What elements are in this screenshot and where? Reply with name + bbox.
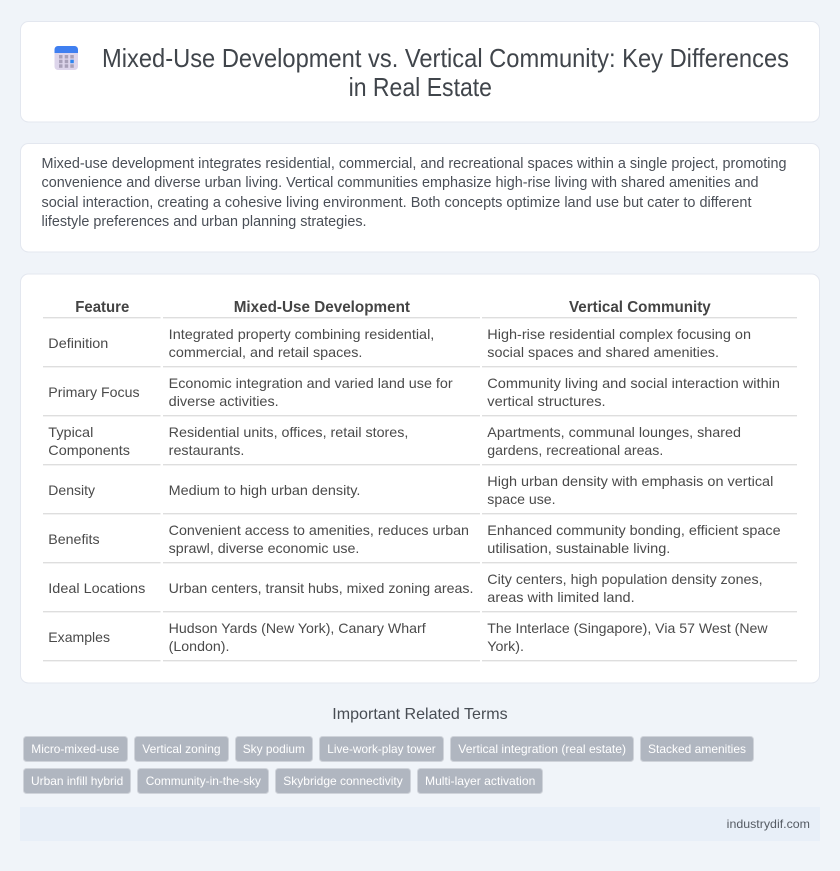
- tag: [640, 736, 754, 762]
- row: definition: commercial, and retail spaces.: [169, 344, 362, 360]
- row: examples: Examples: [48, 629, 110, 645]
- tag: Vertical integration (real estate): [458, 742, 626, 756]
- title: in Real Estate: [349, 74, 492, 102]
- table header: Mixed-Use Development: [234, 299, 411, 316]
- row: examples: York).: [487, 638, 524, 654]
- row: definition: Integrated property combining residential,: [169, 326, 434, 342]
- intro text: convenience and diverse urban living. Vertical communities emphasize high-rise living with shared amenities and: [42, 175, 758, 191]
- row: definition: Definition: [48, 335, 108, 351]
- tag: [236, 736, 312, 762]
- row: benefits: Convenient access to amenities, reduces urban: [169, 522, 469, 538]
- tag: Vertical zoning: [142, 742, 221, 756]
- row: primary focus: vertical structures.: [487, 393, 606, 409]
- title: Mixed-Use Development vs. Vertical Community: Key Differences: [102, 45, 789, 73]
- tag: [418, 768, 542, 794]
- row: density: [48, 473, 773, 507]
- tags: related terms: [24, 736, 754, 794]
- row: typical components: Residential units, offices, retail stores,: [169, 424, 408, 440]
- tag: Sky podium: [243, 742, 305, 756]
- tag: [450, 736, 634, 762]
- row: definition: [48, 326, 751, 360]
- row: benefits: Benefits: [48, 531, 100, 547]
- tag: Live-work-play tower: [327, 742, 436, 756]
- row: ideal locations: City centers, high population density zones,: [487, 571, 763, 587]
- footer: [20, 807, 820, 841]
- icon: calendar: [54, 46, 78, 70]
- row: examples: [48, 620, 768, 654]
- heading: important related terms: Important Related Terms: [332, 706, 508, 723]
- tag: Skybridge connectivity: [283, 774, 403, 788]
- row: benefits: [48, 522, 781, 556]
- row: primary focus: [48, 375, 780, 409]
- panel: introduction: [20, 144, 820, 252]
- row: density: Density: [48, 482, 95, 498]
- intro text: social interaction, creating a cohesive living environment. Both concepts optimize land use but cater to different: [42, 195, 752, 211]
- tag: Multi-layer activation: [425, 774, 535, 788]
- intro text: Mixed-use development integrates residential, commercial, and recreational spaces within a single project, promoting: [42, 156, 786, 172]
- intro text: [42, 156, 786, 230]
- table header: Feature: [75, 299, 129, 316]
- row: typical components: Components: [48, 442, 130, 458]
- row: density: High urban density with emphasis on vertical: [487, 473, 773, 489]
- row: benefits: Enhanced community bonding, efficient space: [487, 522, 781, 538]
- row: primary focus: diverse activities.: [169, 393, 279, 409]
- tag: [320, 736, 444, 762]
- row: examples: The Interlace (Singapore), Via 57 West (New: [487, 620, 768, 636]
- row: ideal locations: areas with limited land.: [487, 589, 635, 605]
- row: typical components: gardens, recreational areas.: [487, 442, 663, 458]
- row: benefits: sprawl, diverse economic use.: [169, 540, 359, 556]
- row: typical components: restaurants.: [169, 442, 244, 458]
- row: primary focus: Primary Focus: [48, 384, 140, 400]
- row: primary focus: Community living and social interaction within: [487, 375, 780, 391]
- tag: Urban infill hybrid: [31, 774, 123, 788]
- tag: Micro-mixed-use: [31, 742, 120, 756]
- row: density: Medium to high urban density.: [169, 482, 360, 498]
- tag: Community-in-the-sky: [146, 774, 261, 788]
- row: density: space use.: [487, 491, 556, 507]
- row: examples: Hudson Yards (New York), Canary Wharf: [169, 620, 426, 636]
- row: typical components: [48, 424, 741, 458]
- row: ideal locations: [48, 571, 763, 605]
- table header: Vertical Community: [569, 299, 711, 316]
- tag: [134, 736, 228, 762]
- row: benefits: utilisation, sustainable living.: [487, 540, 670, 556]
- tag: Stacked amenities: [648, 742, 746, 756]
- panel: header: [20, 22, 820, 122]
- tag: [24, 736, 128, 762]
- row: typical components: Apartments, communal lounges, shared: [487, 424, 741, 440]
- table header: [75, 299, 711, 316]
- tag: [276, 768, 410, 794]
- row: definition: social spaces and shared amenities.: [487, 344, 719, 360]
- row: examples: (London).: [169, 638, 229, 654]
- row: definition: High-rise residential complex focusing on: [487, 326, 751, 342]
- row: typical components: Typical: [48, 424, 93, 440]
- row: ideal locations: Urban centers, transit hubs, mixed zoning areas.: [169, 580, 473, 596]
- tag: [138, 768, 268, 794]
- footer: industrydif.com: [727, 817, 810, 831]
- row: ideal locations: Ideal Locations: [48, 580, 145, 596]
- row: primary focus: Economic integration and varied land use for: [169, 375, 453, 391]
- tag: [24, 768, 130, 794]
- panel: comparison table: [20, 274, 820, 683]
- intro text: lifestyle preferences and urban planning strategies.: [42, 214, 366, 230]
- title: [102, 45, 789, 102]
